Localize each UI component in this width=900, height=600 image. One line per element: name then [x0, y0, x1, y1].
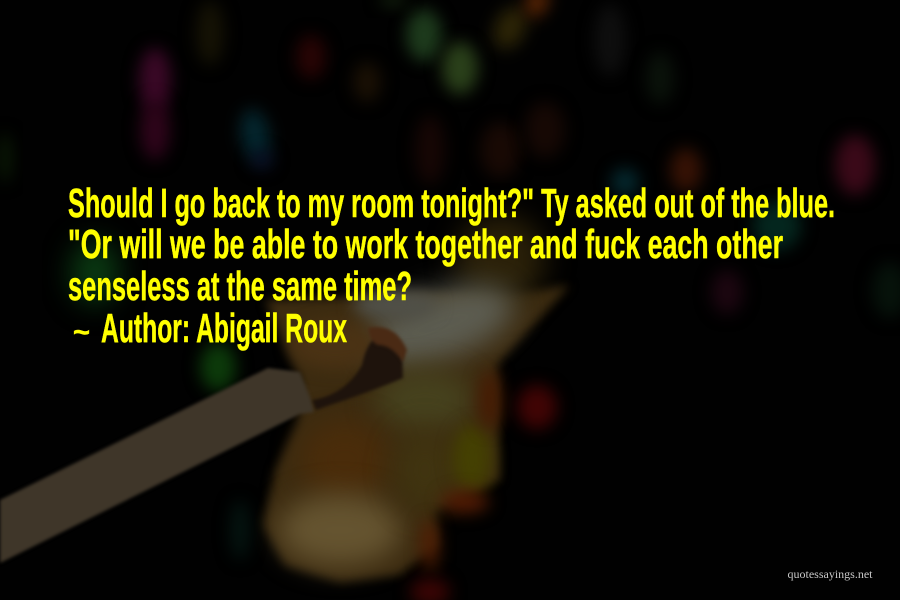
- cigarette: [0, 327, 407, 563]
- author line: Author: Abigail Roux: [101, 305, 347, 351]
- flame lower body: [300, 420, 390, 500]
- flame silhouette: [263, 285, 570, 582]
- flame white core: [355, 269, 525, 381]
- cigarette ember: [312, 335, 403, 410]
- author line: [73, 305, 347, 351]
- watermark: quotessayings.net: [788, 567, 873, 581]
- bokeh lights: [0, 0, 900, 391]
- yellow bokeh: [452, 424, 492, 492]
- flame glow: [230, 215, 570, 600]
- red bokeh: [517, 385, 557, 429]
- quote text: [68, 180, 835, 351]
- author line: ~: [73, 316, 90, 349]
- cigarette paper: [0, 368, 314, 563]
- quote line 3: senseless at the same time?: [68, 263, 412, 309]
